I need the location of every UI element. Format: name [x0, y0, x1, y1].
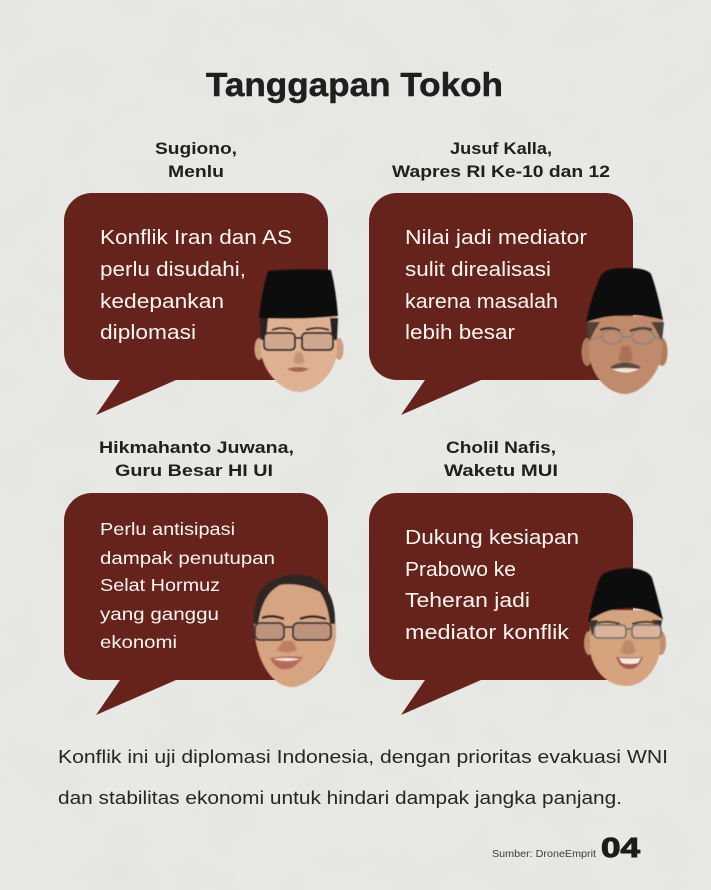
name: Jusuf Kalla: Wapres RI Ke-10 dan 12 [392, 162, 610, 181]
panel: Hikmahanto Juwana [64, 438, 336, 715]
name: Cholil Nafis: Waketu MUI [444, 461, 558, 480]
name: Hikmahanto Juwana: Hikmahanto Juwana, [99, 438, 294, 457]
portrait: Sugiono [254, 269, 344, 392]
quote text [100, 227, 292, 344]
portrait: Hikmahanto Juwana [254, 574, 336, 687]
portrait: Jusuf Kalla [582, 268, 668, 394]
quote text: diplomasi [100, 322, 196, 344]
portrait: Cholil Nafis [584, 568, 666, 686]
name: Sugiono [155, 139, 237, 181]
closing statement: dan stabilitas ekonomi untuk hindari dampak jangka panjang. [58, 788, 622, 808]
quote text: lebih besar [405, 322, 515, 344]
closing statement [58, 747, 668, 808]
quote text: Konflik Iran dan AS [100, 227, 292, 249]
title: Tanggapan Tokoh [206, 66, 503, 103]
panel: Jusuf Kalla [369, 139, 668, 415]
quote text: Dukung kesiapan [405, 527, 579, 549]
quote text: yang ganggu [100, 604, 219, 624]
quote text: Teheran jadi [405, 590, 530, 612]
name: Cholil Nafis: Cholil Nafis, [446, 438, 556, 457]
page number: 04 [601, 832, 641, 863]
name: Jusuf Kalla [392, 139, 610, 181]
quote text [100, 519, 275, 652]
quote text: kedepankan [100, 291, 224, 313]
quote text: Perlu antisipasi [100, 519, 235, 539]
quote text: Prabowo ke [405, 559, 516, 581]
speech bubble [64, 493, 328, 715]
quote text [405, 227, 587, 344]
name: Sugiono: Menlu [168, 162, 224, 181]
quote text [405, 527, 579, 644]
name: Hikmahanto Juwana: Guru Besar HI UI [115, 461, 273, 480]
panel: Cholil Nafis [369, 438, 666, 715]
name: Cholil Nafis [444, 438, 558, 480]
quote text: mediator konflik [405, 622, 570, 644]
source: Sumber: DroneEmprit [492, 849, 596, 860]
closing statement: Konflik ini uji diplomasi Indonesia, dengan prioritas evakuasi WNI [58, 747, 668, 767]
quote text: sulit direalisasi [405, 259, 551, 281]
quote text: ekonomi [100, 632, 177, 652]
name: Sugiono: Sugiono, [155, 139, 237, 158]
name: Jusuf Kalla: Jusuf Kalla, [450, 139, 552, 158]
quote text: dampak penutupan [100, 548, 275, 568]
quote text: karena masalah [405, 291, 558, 313]
speech bubble [369, 493, 633, 715]
speech bubble [64, 193, 328, 415]
quote text: perlu disudahi, [100, 259, 246, 281]
name: Hikmahanto Juwana [99, 438, 294, 480]
quote text: Selat Hormuz [100, 575, 220, 595]
quote text: Nilai jadi mediator [405, 227, 587, 249]
speech bubble [369, 193, 633, 415]
panel: Sugiono [64, 139, 344, 415]
